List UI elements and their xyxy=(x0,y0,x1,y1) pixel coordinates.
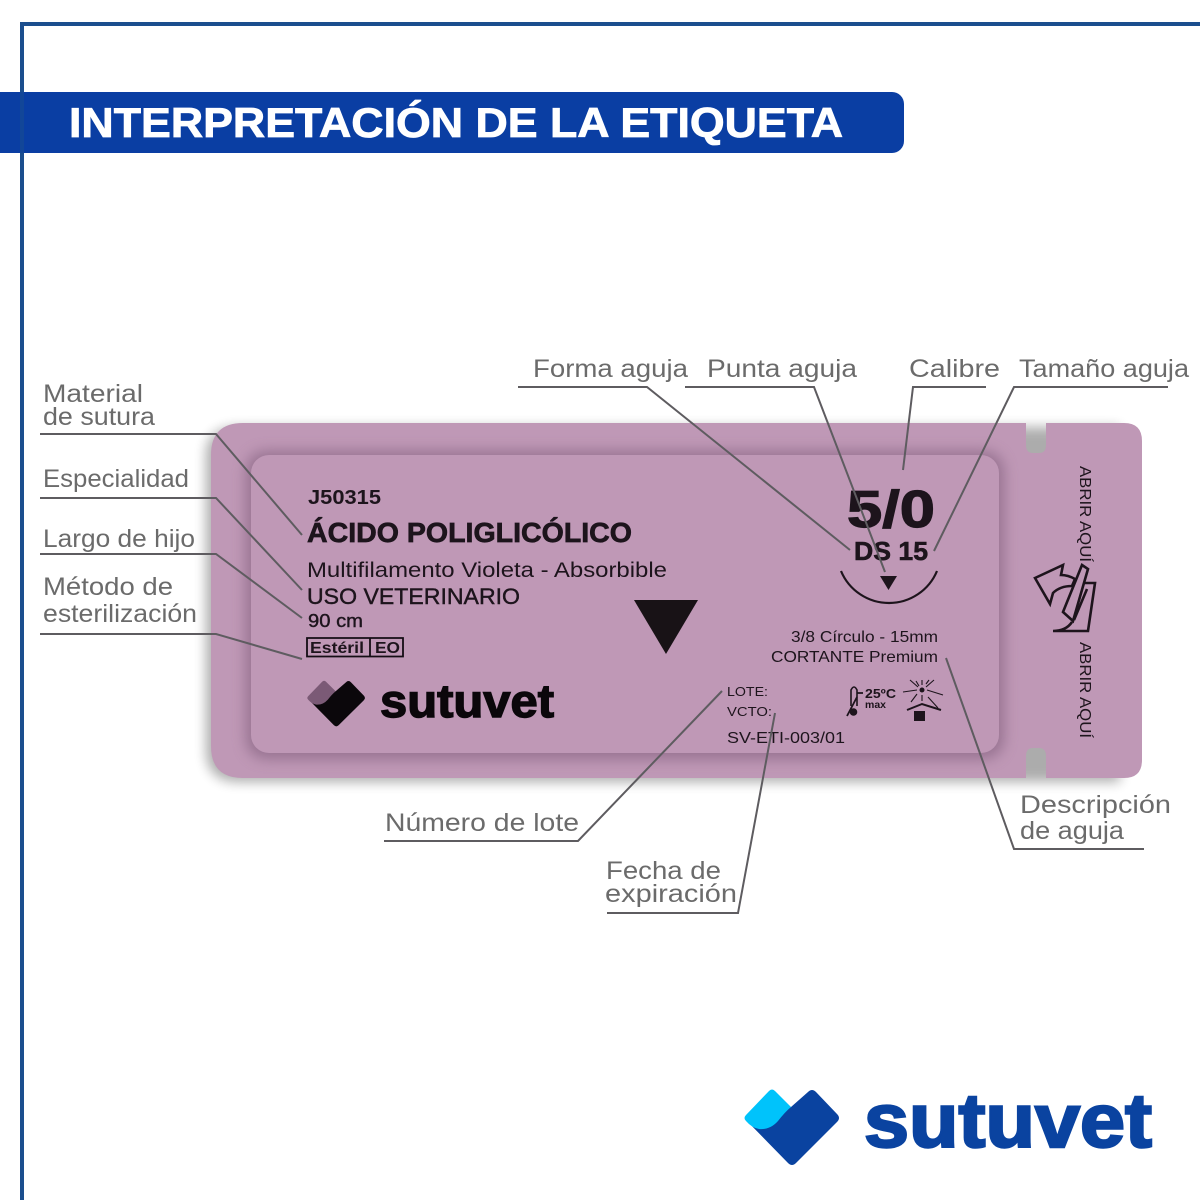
product code: J50315 xyxy=(308,487,381,509)
wordmark: sutuvet xyxy=(864,1079,1152,1164)
needle description: CORTANTE Premium xyxy=(771,649,938,666)
label: Fecha de expiración xyxy=(605,713,775,913)
label: Forma aguja xyxy=(518,355,850,550)
icon: temperature xyxy=(847,686,897,716)
label: Fecha de expiración: expiración xyxy=(605,880,737,908)
label: Especialidad xyxy=(40,465,302,590)
brand logo xyxy=(744,1079,1152,1165)
label: Fecha de expiración: Fecha de xyxy=(606,857,721,885)
label: Material de sutura xyxy=(40,380,302,535)
label: Descripción de aguja: de aguja xyxy=(1020,817,1124,845)
needle description: 3/8 Círculo - 15mm xyxy=(791,629,938,646)
label: Descripción de aguja xyxy=(946,658,1171,849)
filament description: Multifilamento Violeta - Absorbible xyxy=(307,559,667,582)
thread length: 90 cm xyxy=(308,611,363,631)
label: Punta aguja xyxy=(685,355,885,572)
label: Tamaño aguja: Tamaño aguja xyxy=(1019,355,1189,383)
sterile badge xyxy=(307,638,403,657)
lot and expiry fields: VCTO: xyxy=(727,704,772,719)
icon: temperature: 25ºC xyxy=(865,686,897,701)
label: Calibre xyxy=(903,355,1000,470)
label: Punta aguja: Punta aguja xyxy=(707,355,857,383)
label: Calibre: Calibre xyxy=(909,355,1000,383)
label: Forma aguja: Forma aguja xyxy=(533,355,688,383)
label logo xyxy=(307,675,554,727)
icon: heart mark xyxy=(744,1090,839,1165)
tear text bottom: ABRIR AQUÍ xyxy=(1076,642,1095,739)
label: Método de esterilización xyxy=(40,573,302,659)
label: Número de lote xyxy=(384,691,722,841)
gauge: 5/0 xyxy=(847,481,935,539)
lot and expiry fields: LOTE: xyxy=(727,684,768,699)
title banner xyxy=(0,92,904,153)
label: Largo de hijo: Largo de hijo xyxy=(43,525,195,553)
label: Método de esterilización: Método de xyxy=(43,573,173,601)
needle description xyxy=(771,629,938,666)
label: Tamaño aguja xyxy=(934,355,1189,551)
label: Método de esterilización: esterilización xyxy=(43,600,197,628)
large triangle mark xyxy=(634,600,698,654)
label: Descripción de aguja: Descripción xyxy=(1020,791,1171,819)
label logo: sutuvet xyxy=(380,675,554,727)
label: Largo de hijo xyxy=(40,525,302,618)
title: INTERPRETACIÓN DE LA ETIQUETA xyxy=(69,98,843,146)
needle size: DS 15 xyxy=(854,536,928,566)
material name: ÁCIDO POLIGLICÓLICO xyxy=(307,517,632,548)
label: Especialidad: Especialidad xyxy=(43,465,189,493)
icon: temperature: max xyxy=(865,700,886,711)
label: Material de sutura: Material xyxy=(43,380,143,408)
label: Material de sutura: de sutura xyxy=(43,403,155,431)
sterile badge: Estéril xyxy=(310,640,364,657)
specialty: USO VETERINARIO xyxy=(307,584,520,609)
inner panel xyxy=(246,451,1004,759)
tear text top: ABRIR AQUÍ xyxy=(1076,466,1095,563)
suture label card xyxy=(206,423,1142,782)
lot and expiry fields: SV-ETI-003/01 xyxy=(727,730,845,747)
icon: keep away from sunlight xyxy=(903,680,943,721)
needle arc and point icon xyxy=(841,571,937,603)
label: Número de lote: Número de lote xyxy=(385,809,579,837)
icon: open here arrow xyxy=(1035,565,1095,631)
sterile badge: EO xyxy=(375,640,400,657)
lot and expiry fields xyxy=(727,684,845,747)
